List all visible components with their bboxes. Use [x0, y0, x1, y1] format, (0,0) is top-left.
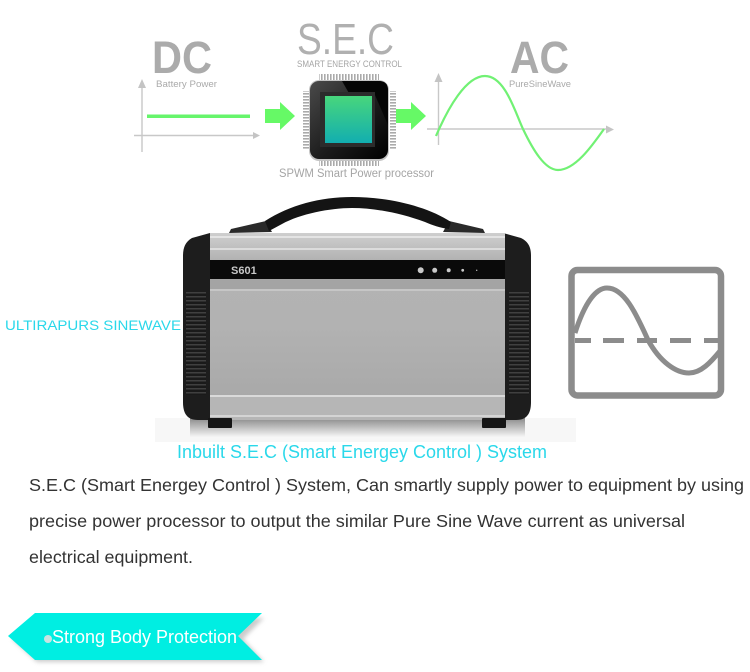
DC heading: DC — [152, 32, 212, 83]
Battery Power caption: Battery Power — [156, 79, 217, 89]
AC diagram — [427, 32, 614, 170]
left grip ribs — [186, 292, 206, 395]
AC heading: AC — [510, 32, 569, 83]
SPWM processor caption: SPWM Smart Power processor — [279, 168, 434, 180]
arrow: DC to processor — [265, 102, 295, 130]
aluminium body — [210, 233, 505, 420]
icon: processor chip — [303, 74, 396, 166]
AC axes — [427, 73, 614, 145]
ribbon: Strong Body Protection — [8, 613, 264, 662]
right grip ribs — [509, 292, 529, 395]
description paragraph: precise power processor to output the similar Pure Sine Wave current as universal — [29, 511, 685, 531]
description paragraph: electrical equipment. — [29, 547, 193, 567]
DC diagram — [134, 32, 260, 152]
description paragraph: S.E.C (Smart Energey Control ) System, Can smartly supply power to equipment by using — [29, 475, 744, 495]
S601 model label: S601 — [231, 265, 257, 277]
product: power station — [155, 197, 576, 442]
right bumper — [498, 233, 531, 420]
feet — [208, 418, 506, 428]
DC flat line — [147, 114, 250, 118]
system subtitle: Inbuilt S.E.C (Smart Energey Control ) System — [177, 442, 547, 462]
DC axes — [134, 79, 260, 152]
control band — [210, 260, 505, 279]
product floor backdrop — [155, 418, 576, 442]
Ultrapure sinewave label: ULTIRAPURS SINEWAVE — [5, 317, 181, 333]
Smart Energy Control caption: SMART ENERGY CONTROL — [297, 59, 402, 69]
AC sine wave — [436, 76, 604, 170]
status lights — [418, 267, 477, 273]
arrow: processor to AC — [396, 102, 426, 130]
S.E.C heading: S.E.C — [297, 15, 394, 64]
description paragraph — [29, 475, 744, 567]
carry handle — [229, 197, 485, 233]
left bumper — [183, 233, 215, 420]
product floor shadow — [190, 418, 525, 437]
ribbon: Strong Body Protection: Strong Body Protection — [52, 627, 237, 647]
Pure Sine Wave caption: PureSineWave — [509, 79, 571, 89]
icon: sine wave frame — [572, 270, 721, 396]
